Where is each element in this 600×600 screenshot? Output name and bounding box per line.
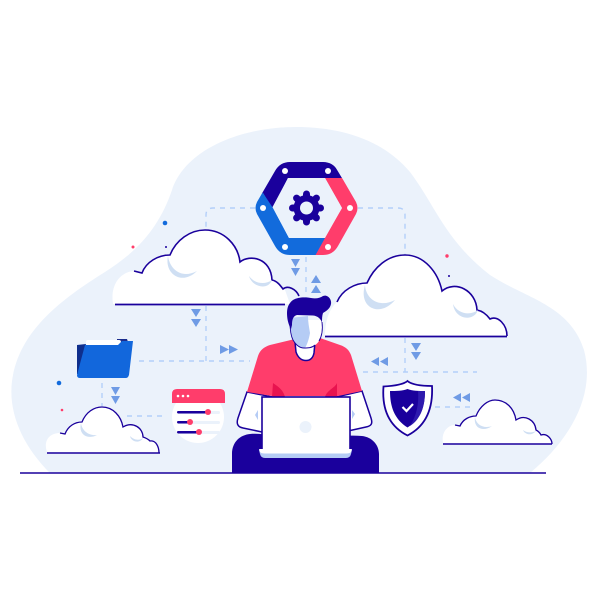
arrow: hexagon down (291, 259, 300, 276)
arrow: small cloud left (453, 393, 470, 402)
face outline (290, 322, 322, 348)
cloud: lower left (46, 407, 160, 453)
cloud: upper right (325, 255, 507, 336)
background blob (11, 127, 587, 473)
arrow: left to person (371, 357, 388, 366)
dashed connectors (102, 208, 477, 416)
arrows (111, 259, 470, 404)
decorative dots (57, 221, 450, 411)
arrow: right to person (220, 345, 238, 354)
ground line (20, 472, 546, 474)
shirt shadow (272, 383, 337, 397)
shield icon (383, 381, 432, 436)
right arm (332, 391, 372, 431)
hair (287, 296, 331, 329)
arrow: cloud down (191, 309, 201, 327)
cloud: lower right (443, 400, 552, 444)
gear (292, 194, 320, 222)
folder icon (77, 339, 133, 378)
left arm (237, 392, 278, 432)
cloud: upper left (112, 230, 299, 304)
arrow: folder down (111, 387, 120, 404)
neck (295, 342, 315, 360)
arrow: right cloud down (411, 343, 421, 360)
arm shading (255, 410, 355, 420)
hexagon gear icon (256, 162, 358, 255)
settings panel icon (172, 389, 225, 443)
legs (232, 434, 379, 472)
arrow: up to hexagon (311, 275, 321, 293)
person at laptop (232, 296, 379, 472)
laptop (259, 397, 352, 458)
face (290, 320, 322, 348)
shirt (247, 338, 362, 396)
